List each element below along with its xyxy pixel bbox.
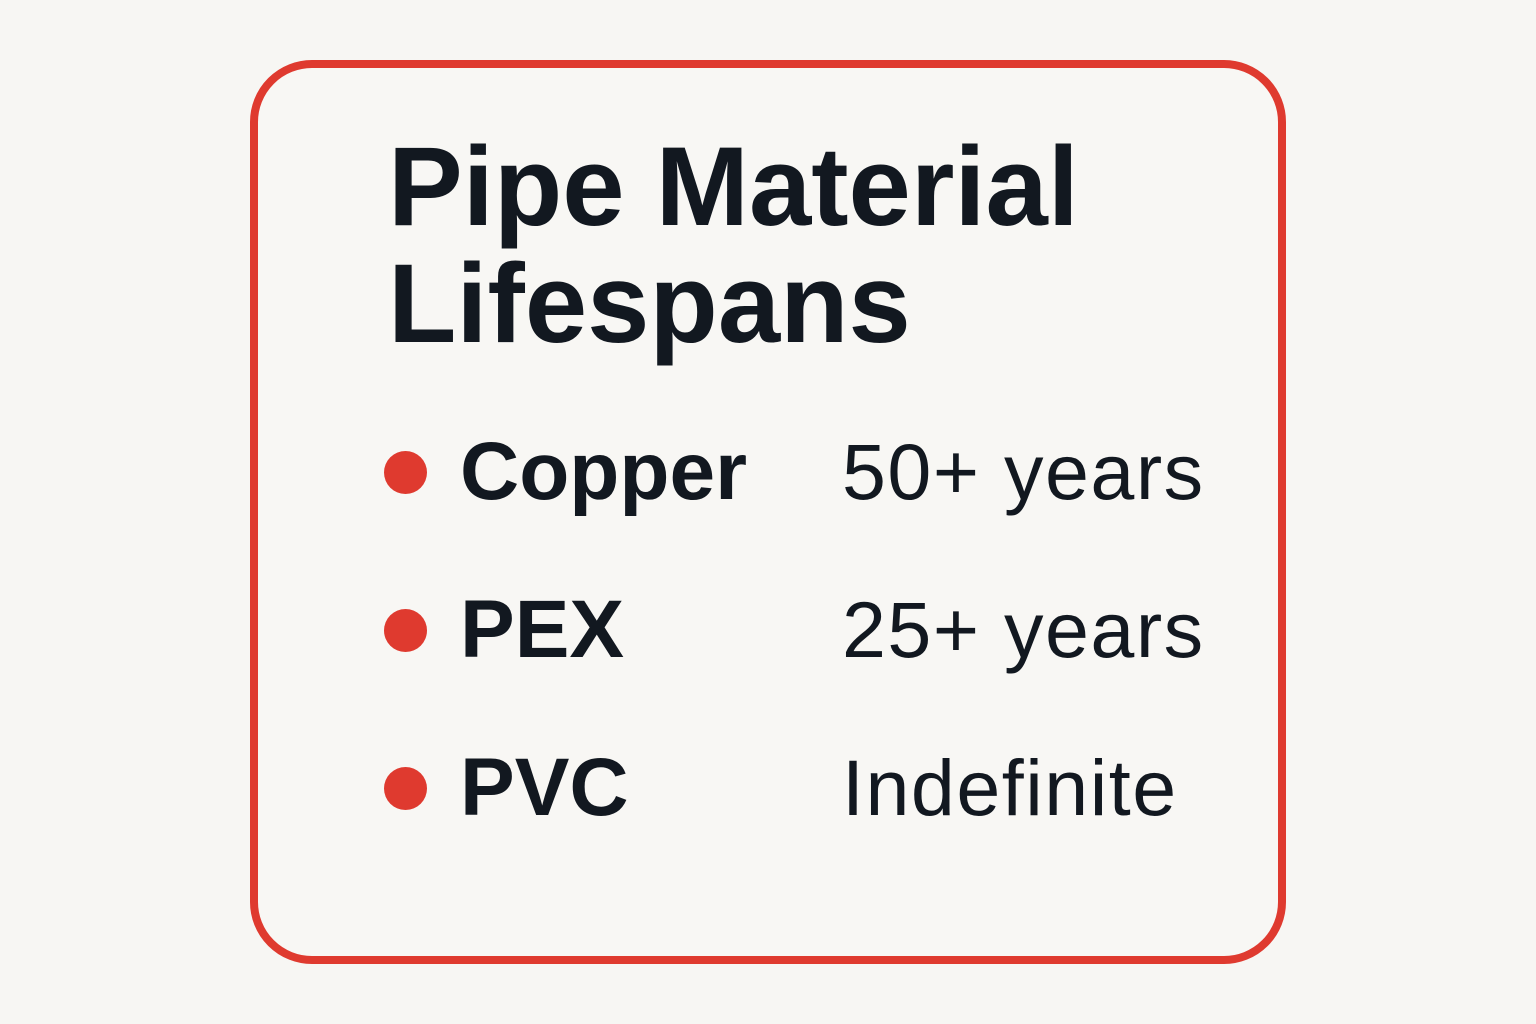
row: copper [384, 426, 1205, 517]
panel: card border [250, 60, 1286, 964]
title: Lifespans [388, 241, 911, 366]
title [388, 124, 1079, 366]
title: Pipe Material [388, 124, 1079, 249]
lifespan value: 25+ years [842, 585, 1205, 674]
icon: bullet dot [384, 451, 427, 494]
material name: PEX [460, 584, 624, 675]
row: PEX [384, 584, 1205, 675]
icon: bullet dot [384, 767, 427, 810]
lifespan value: 50+ years [842, 427, 1205, 516]
row: PVC [384, 742, 1178, 833]
lifespan value: Indefinite [842, 743, 1178, 832]
material name: Copper [460, 426, 747, 517]
material name: PVC [460, 742, 629, 833]
icon: bullet dot [384, 609, 427, 652]
